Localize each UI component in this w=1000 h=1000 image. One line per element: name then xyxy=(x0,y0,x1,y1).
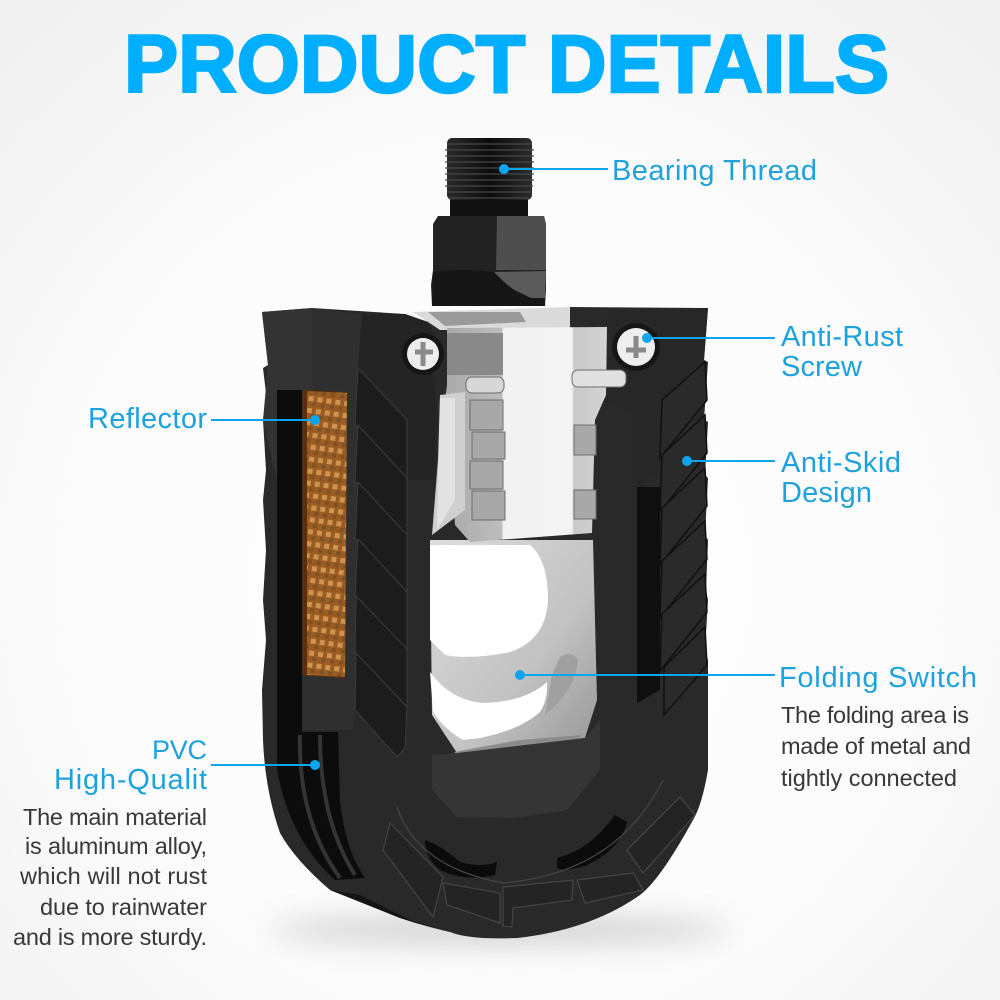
anti-skid ridges, left xyxy=(355,368,407,757)
callout: Folding Switch xyxy=(515,662,977,791)
callout: PVC High-Quality: PVC xyxy=(152,735,207,765)
callout: PVC High-Quality: which will not rust xyxy=(19,863,207,889)
hex nut xyxy=(431,216,546,306)
screw left xyxy=(402,333,444,375)
callout: PVC High-Quality: is aluminum alloy, xyxy=(25,833,207,859)
callout: Anti-Skid Design: Anti-Skid xyxy=(781,447,901,479)
anti-skid ridges, right xyxy=(660,362,707,715)
callout: PVC High-Quality: The main material xyxy=(23,804,207,830)
screw right xyxy=(612,323,660,371)
frame opening with folding metal xyxy=(430,540,597,756)
callout: Anti-Rust Screw: Anti-Rust xyxy=(781,321,903,353)
black body xyxy=(262,307,708,938)
bearing thread axle xyxy=(445,138,534,220)
callout: PVC High-Quality: due to rainwater xyxy=(40,894,207,920)
tread blocks xyxy=(383,780,695,927)
callout: PVC High-Quality: High-Qualit xyxy=(54,764,207,796)
U frame lower panel xyxy=(425,720,627,878)
title: PRODUCT DETAILS xyxy=(124,19,889,110)
callout: Bearing Thread xyxy=(499,155,817,187)
callout: Reflector: Reflector xyxy=(88,403,207,435)
reflector xyxy=(302,390,347,678)
callout: PVC High-Quality: and is more sturdy. xyxy=(13,924,207,950)
callout: PVC High-Quality xyxy=(13,735,320,950)
pedal illustration xyxy=(262,138,708,938)
callout: Anti-Rust Screw xyxy=(642,321,903,383)
callout: Reflector xyxy=(88,403,320,435)
PVC side fins xyxy=(300,735,355,878)
callout: Anti-Skid Design: Design xyxy=(781,477,872,509)
callout: Anti-Rust Screw: Screw xyxy=(781,351,863,383)
metal block xyxy=(413,307,607,542)
metal teeth xyxy=(466,370,626,520)
callout: Bearing Thread: Bearing Thread xyxy=(612,155,817,187)
callout: Folding Switch: Folding Switch xyxy=(779,662,977,694)
callout: Folding Switch: The folding area is xyxy=(781,702,969,728)
callout: Anti-Skid Design xyxy=(682,447,901,509)
callout: Folding Switch: made of metal and xyxy=(781,733,971,759)
callout: Folding Switch: tightly connected xyxy=(781,765,957,791)
